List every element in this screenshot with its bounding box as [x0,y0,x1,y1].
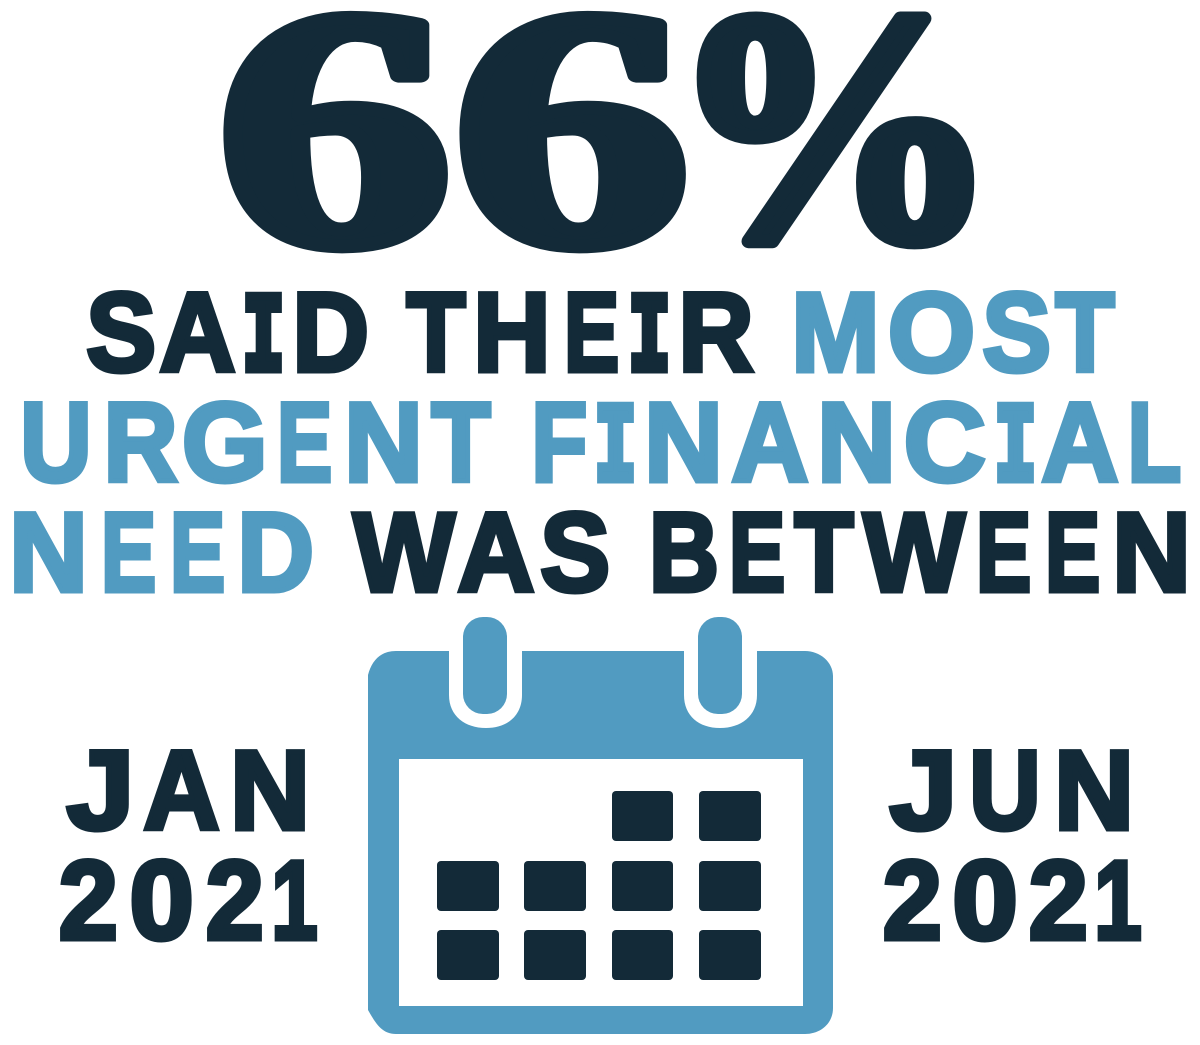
end date: Jun 2021: N [1054,728,1134,853]
title: 66% statistic [217,0,998,317]
heading: said their most urgent financial need was between: E [729,490,785,615]
heading: said their most urgent financial need was between: S [540,490,610,615]
start date: Jan 2021: N [230,728,310,853]
heading: said their most urgent financial need was between: N [817,380,896,505]
start date: Jan 2021: 2 [59,838,118,963]
heading: said their most urgent financial need was between: A [160,270,236,395]
heading: said their most urgent financial need was between: T [406,270,466,395]
heading: said their most urgent financial need was between: R [104,380,178,505]
heading: said their most urgent financial need was between [9,270,1191,615]
end date: Jun 2021: U [969,728,1041,853]
heading: said their most urgent financial need was between: A [1042,380,1118,505]
heading: said their most urgent financial need was between: F [531,380,587,505]
heading: said their most urgent financial need was between: T [1056,270,1114,395]
heading: said their most urgent financial need was between: O [888,270,975,395]
heading: said their most urgent financial need was between: H [473,270,551,395]
start date: Jan 2021 [59,728,318,963]
heading: said their most urgent financial need was between: N [644,380,723,505]
heading: said their most urgent financial need was between: W [353,490,455,615]
start date: Jan 2021: 0 [130,838,194,963]
heading: said their most urgent financial need was between: E [564,270,619,395]
heading: said their most urgent financial need was between: A [458,490,534,615]
heading: said their most urgent financial need was between: E [976,490,1031,615]
heading: said their most urgent financial need was between: E [170,490,225,615]
heading: said their most urgent financial need was between: N [9,490,88,615]
heading: said their most urgent financial need was between: W [863,490,965,615]
heading: said their most urgent financial need was between: E [277,380,332,505]
end date: Jun 2021: 0 [952,838,1018,963]
heading: said their most urgent financial need was between: U [20,380,92,505]
heading: said their most urgent financial need was between: N [1112,490,1191,615]
heading: said their most urgent financial need was between: T [794,490,854,615]
heading: said their most urgent financial need was between: N [344,380,423,505]
heading: said their most urgent financial need was between: I [995,388,1036,513]
end date: Jun 2021: J [890,728,958,853]
start date: Jan 2021: A [144,728,220,853]
start date: Jan 2021: J [67,728,134,853]
heading: said their most urgent financial need was between: A [732,380,808,505]
icon: calendar [368,617,833,1034]
heading: said their most urgent financial need was between: S [982,270,1051,395]
heading: said their most urgent financial need was between: S [86,270,156,395]
heading: said their most urgent financial need was between: L [1128,380,1181,505]
heading: said their most urgent financial need was between: G [182,380,268,505]
start date: Jan 2021: 2 [206,838,264,963]
heading: said their most urgent financial need was between: B [649,490,719,615]
heading: said their most urgent financial need was between: D [292,270,369,395]
heading: said their most urgent financial need was between: C [904,380,986,505]
end date: Jun 2021 [883,728,1142,963]
heading: said their most urgent financial need was between: D [237,490,314,615]
heading: said their most urgent financial need was between: E [1045,490,1100,615]
heading: said their most urgent financial need was between: I [595,388,636,513]
heading: said their most urgent financial need was between: M [791,270,880,395]
end date: Jun 2021: 2 [883,838,942,963]
heading: said their most urgent financial need was between: I [243,278,284,403]
heading: said their most urgent financial need was between: I [629,278,670,403]
heading: said their most urgent financial need was between: T [432,380,490,505]
heading: said their most urgent financial need was between: E [101,490,156,615]
start date: Jan 2021: 1 [271,838,318,963]
end date: Jun 2021: 1 [1094,838,1142,963]
end date: Jun 2021: 2 [1029,838,1088,963]
heading: said their most urgent financial need was between: R [678,270,754,395]
